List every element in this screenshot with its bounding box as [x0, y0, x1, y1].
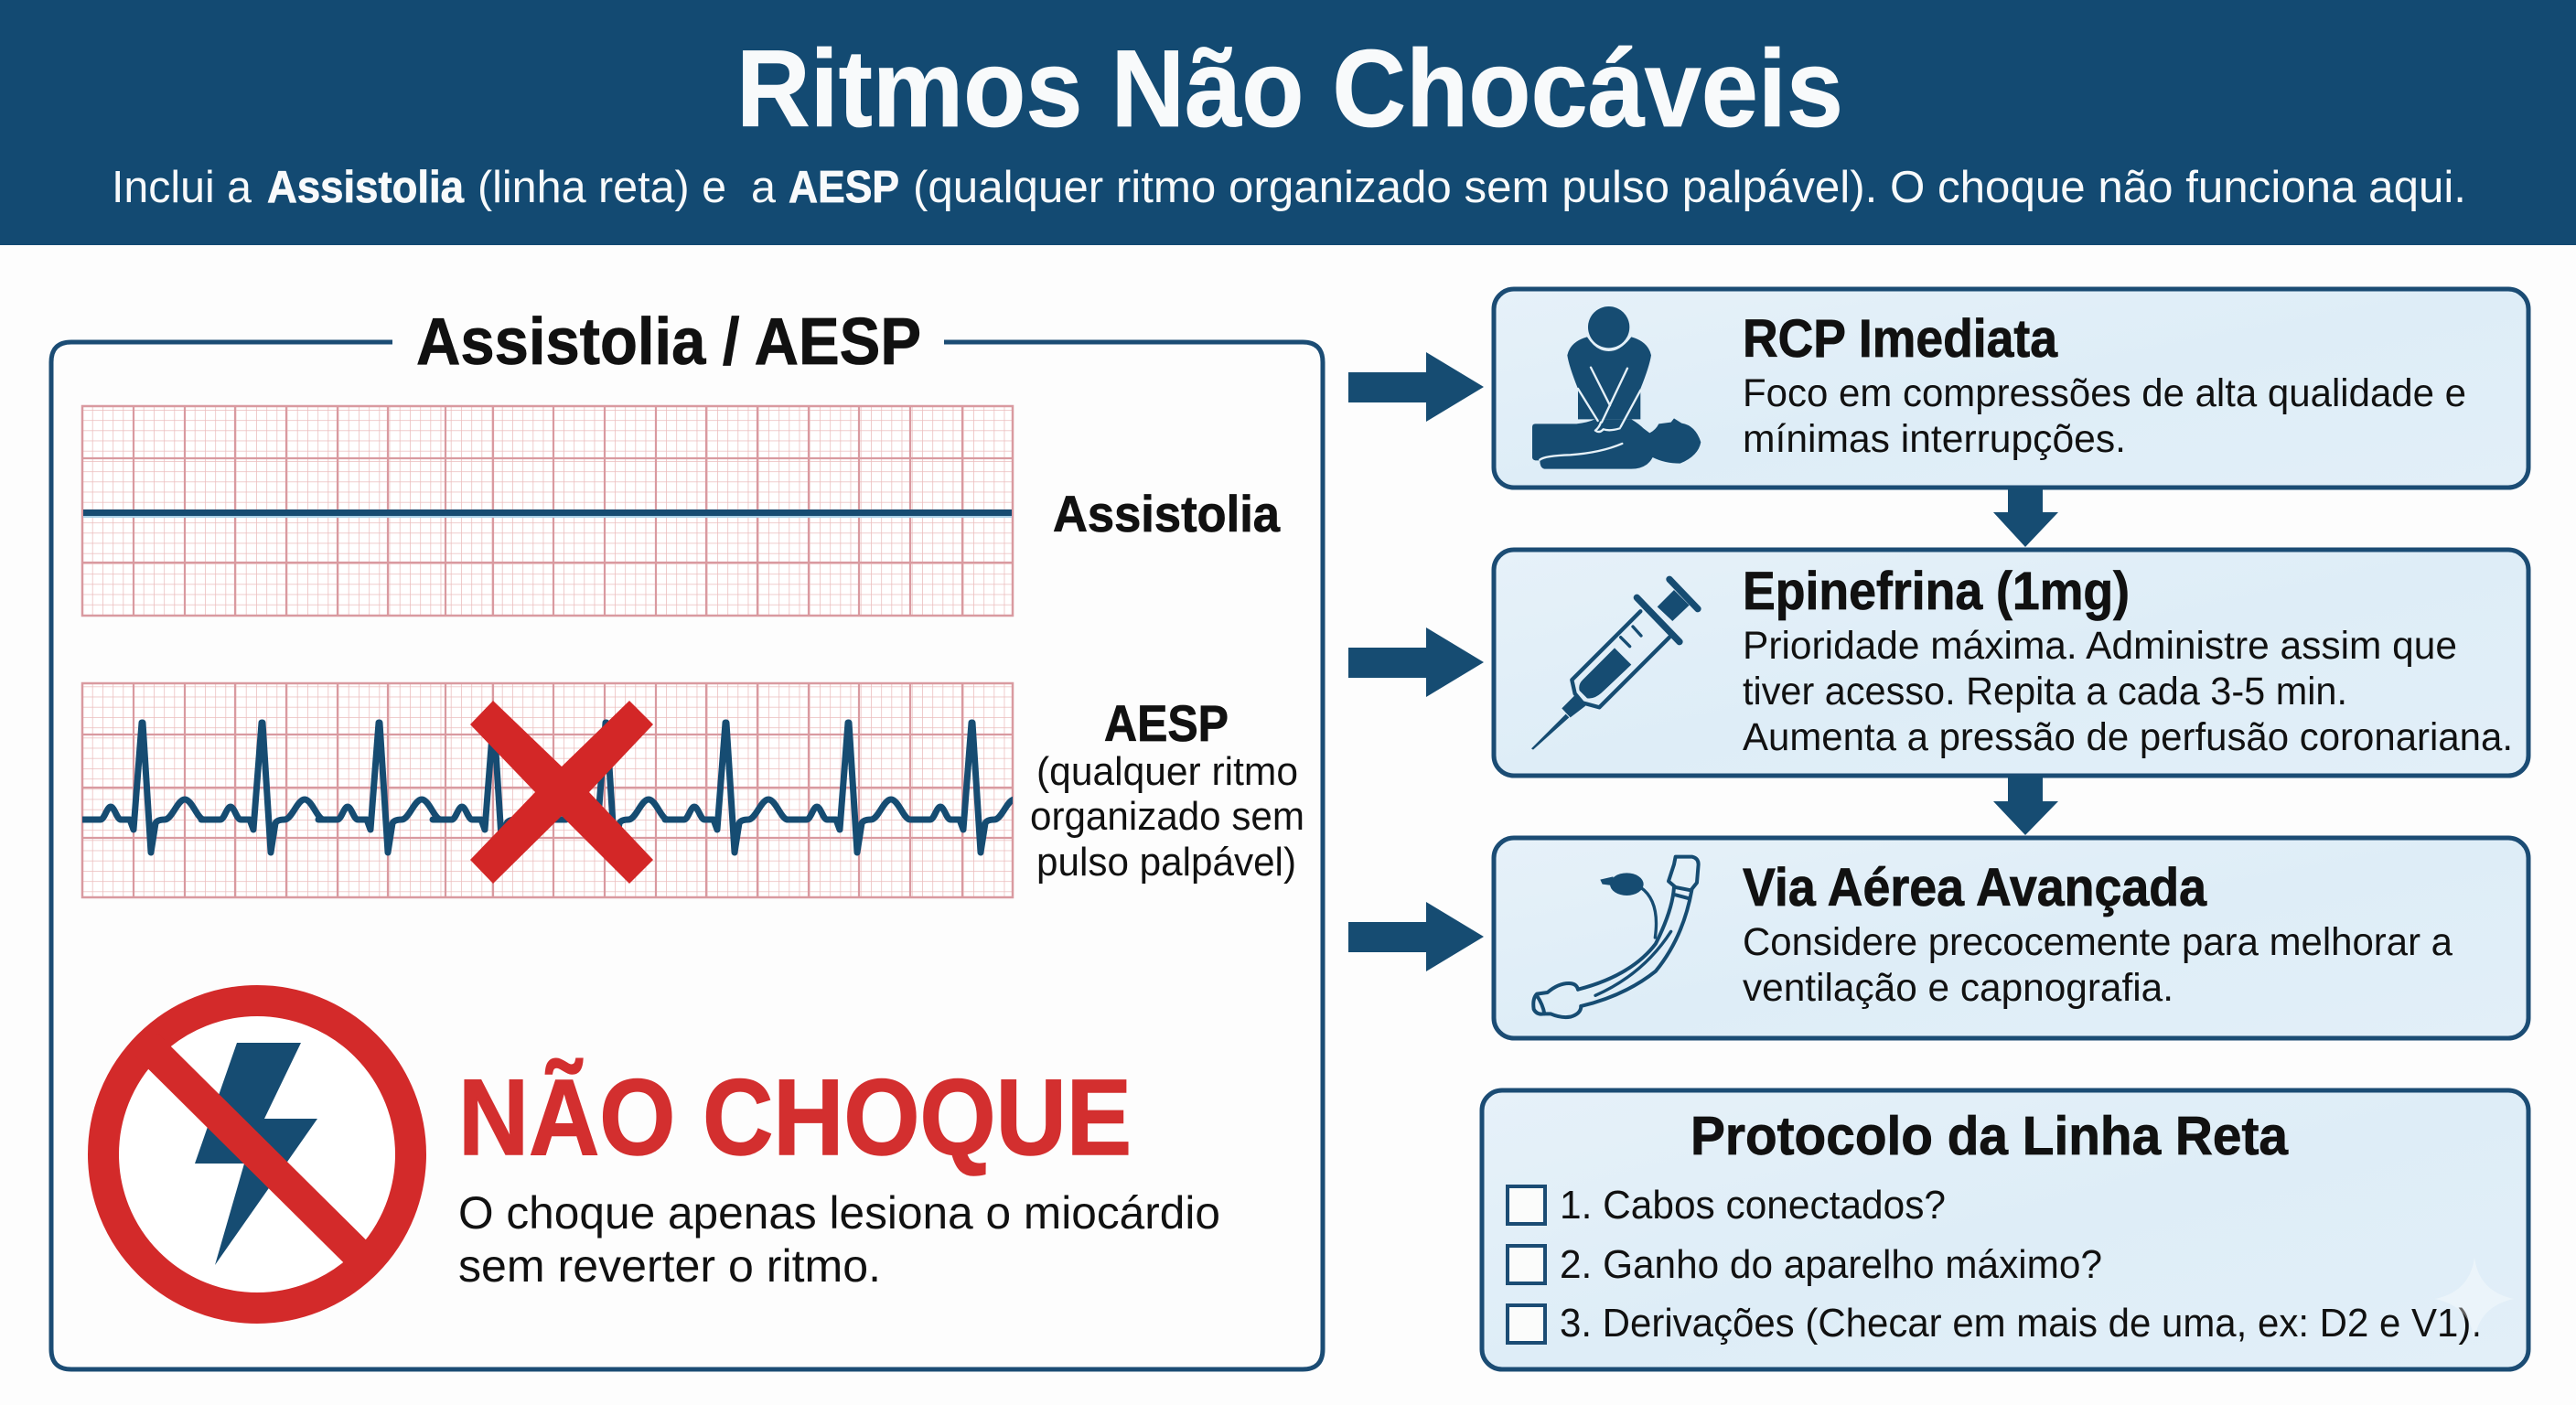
- card heading: Epinefrina (1mg): [1743, 562, 2130, 621]
- label: Assistolia: Assistolia: [1053, 485, 1281, 542]
- checklist item 1: 1. Cabos conectados?: [1560, 1183, 1946, 1228]
- card text: [1743, 920, 2453, 1010]
- header banner: [0, 0, 2576, 245]
- card text: tiver acesso. Repita a cada 3-5 min.: [1743, 670, 2347, 713]
- warning text: NÃO CHOQUE: O choque apenas lesiona o miocárdio: [458, 1187, 1220, 1239]
- subtitle: [112, 163, 2466, 212]
- arrow: Epinefrina to Via Aérea: [1993, 776, 2058, 835]
- panel: Via Aérea Avançada: [1494, 838, 2528, 1038]
- subtitle: (linha reta) e a: [478, 163, 777, 212]
- icon: red X: [470, 701, 653, 884]
- card text: Aumenta a pressão de perfusão coronariana.: [1743, 715, 2513, 759]
- panel: Protocolo da Linha Reta: [1482, 1090, 2528, 1369]
- card text: mínimas interrupções.: [1743, 417, 2126, 461]
- card text: Prioridade máxima. Administre assim que: [1743, 624, 2457, 668]
- card text: Considere precocemente para melhorar a: [1743, 920, 2453, 964]
- icon: no shock: [103, 1001, 411, 1308]
- icon: CPR: [1532, 306, 1701, 469]
- label: AESP: [1030, 694, 1304, 885]
- card text: [1743, 624, 2513, 759]
- arrow: to Epinefrina: [1348, 627, 1484, 697]
- subtitle: AESP: [789, 163, 899, 212]
- card text: ventilação e capnografia.: [1743, 966, 2174, 1010]
- warning text: NÃO CHOQUE: [458, 1057, 1220, 1292]
- card text: [1743, 371, 2466, 461]
- icon: syringe: [1531, 579, 1698, 750]
- checklist item 3: 3. Derivações (Checar em mais de uma, ex: D2 e V1).: [1560, 1301, 2482, 1346]
- chart: PEA strip: [81, 683, 1045, 897]
- panel heading: Assistolia / AESP: [416, 306, 921, 379]
- card text: Foco em compressões de alta qualidade e: [1743, 371, 2466, 415]
- label: AESP: (qualquer ritmo: [1036, 749, 1298, 794]
- chart: asystole strip: [82, 406, 1013, 616]
- icon: endotracheal tube: [1533, 857, 1699, 1017]
- checklist item 2: 2. Ganho do aparelho máximo?: [1560, 1242, 2102, 1287]
- warning text: NÃO CHOQUE: sem reverter o ritmo.: [458, 1240, 881, 1292]
- subtitle: Inclui a: [112, 163, 252, 212]
- label: AESP: AESP: [1104, 694, 1229, 752]
- subtitle: (qualquer ritmo organizado sem pulso palpável). O choque não funciona aqui.: [913, 163, 2466, 212]
- card heading: RCP Imediata: [1743, 309, 2058, 369]
- panel: Assistolia / AESP: [51, 306, 1323, 1369]
- arrow: to RCP: [1348, 352, 1484, 422]
- panel: RCP Imediata: [1494, 289, 2528, 488]
- title: Ritmos Não Chocáveis: [736, 27, 1843, 150]
- panel: Epinefrina: [1494, 550, 2528, 776]
- arrow: RCP to Epinefrina: [1993, 488, 2058, 547]
- card heading: Via Aérea Avançada: [1743, 858, 2207, 917]
- arrow: to Via Aérea: [1348, 902, 1484, 971]
- label: AESP: organizado sem: [1030, 794, 1304, 839]
- label: AESP: pulso palpável): [1036, 840, 1296, 885]
- subtitle: Assistolia: [267, 163, 465, 212]
- checklist heading: Protocolo da Linha Reta: [1690, 1106, 2289, 1166]
- warning text: NÃO CHOQUE: NÃO CHOQUE: [458, 1057, 1132, 1178]
